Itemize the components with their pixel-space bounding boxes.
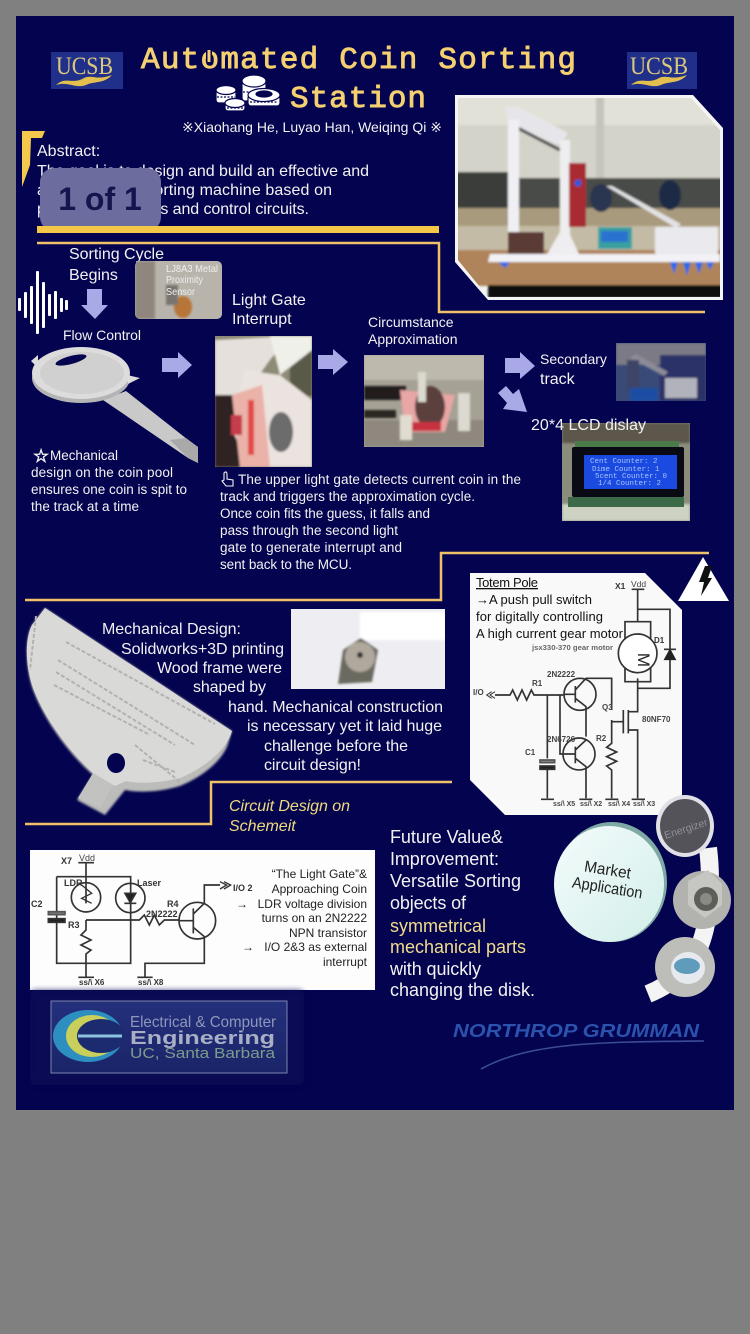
label: circumstance approximation	[368, 314, 458, 347]
circuit labels: 2N2222	[547, 670, 576, 679]
title	[141, 43, 576, 117]
arrow: right 1	[162, 352, 192, 378]
circuit labels: ss/\ X4	[608, 801, 630, 808]
heading: circuit design: Circuit Design on	[229, 798, 350, 815]
text: mechanical design: Solidworks+3D printing	[121, 641, 284, 658]
icon: washer	[655, 937, 715, 997]
logo: ECE UCSB: UC, Santa Barbara	[130, 1045, 276, 1062]
light gate description: NPN transistor	[289, 926, 367, 940]
text: future value: symmetrical	[390, 916, 486, 936]
light gate description: “The Light Gate”&	[272, 867, 367, 881]
text: light gate description: The upper light gate detects current coin in the	[238, 472, 521, 487]
circuit labels: LDR	[64, 878, 83, 888]
circuit labels: Vdd	[631, 579, 646, 589]
light gate description: LDR voltage division	[258, 897, 367, 911]
label: light gate interrupt: Light Gate	[232, 292, 306, 309]
logo: Northrop Grumman: NORTHROP GRUMMAN	[453, 1021, 700, 1041]
abstract text: The goal is to design and build an effective and	[37, 163, 369, 180]
totem pole text: A high current gear motor	[476, 626, 624, 641]
photo: circumstance approximation	[364, 355, 484, 447]
label: secondary track: Secondary	[540, 351, 607, 367]
band connecting items	[648, 848, 710, 994]
label: secondary track: track	[540, 371, 576, 388]
text: mechanical design: shaped by	[193, 679, 266, 696]
text: future value: mechanical parts	[390, 937, 526, 957]
yellow divider bar	[37, 226, 439, 233]
authors: ※Xiaohang He, Luyao Han, Weiqing Qi ※	[182, 119, 442, 135]
abstract text: Abstract:	[37, 143, 100, 160]
text: mechanical coin pool: ☆	[33, 446, 49, 466]
photo: LCD display: Cent Counter: 2	[590, 458, 658, 466]
circuit: light gate	[48, 863, 231, 977]
label: circumstance approximation: Circumstance	[368, 314, 454, 330]
text: future value	[389, 827, 535, 1000]
circuit labels: D1	[654, 636, 665, 645]
photo: gear motor mount	[291, 609, 445, 689]
totem pole text	[476, 575, 624, 641]
photo: light gate	[215, 336, 312, 467]
logo: UCSB left	[51, 52, 123, 89]
market application disc	[554, 822, 667, 942]
icon: coin stacks	[216, 75, 280, 111]
circuit labels: R3	[68, 920, 80, 930]
circuit: gear motor driver	[487, 589, 676, 799]
text: future value: changing the disk.	[390, 980, 535, 1000]
circuit labels	[473, 579, 671, 808]
circuit labels: C2	[31, 899, 43, 909]
circuit labels: I/O	[473, 688, 484, 697]
text: light gate description: pass through the second light	[220, 523, 398, 538]
text: mechanical design: is necessary yet it laid huge	[247, 718, 442, 735]
text: mechanical design	[102, 621, 443, 774]
heading: circuit design: Schemeit	[229, 818, 296, 835]
photo: proximity sensor: Proximity	[166, 274, 204, 286]
text: mechanical design: Mechanical Design:	[102, 621, 241, 638]
photo: secondary track	[616, 343, 706, 401]
text: future value: Future Value&	[390, 827, 503, 847]
logo: Northrop Grumman	[453, 1021, 704, 1069]
page badge: 1 of 1	[58, 181, 142, 217]
text: mechanical coin pool: design on the coin pool	[31, 465, 173, 480]
circuit labels: ss/\ X2	[580, 801, 602, 808]
circuit labels: 2N2222	[146, 909, 178, 919]
light gate description: Approaching Coin	[272, 882, 367, 896]
circuit labels: X1	[615, 581, 626, 591]
circuit labels: Q3	[602, 703, 613, 712]
text: future value: objects of	[390, 893, 467, 913]
market application disc: Market	[583, 858, 633, 883]
bracket accent	[22, 131, 45, 187]
frame line: upper	[37, 243, 705, 312]
totem pole text: for digitally controlling	[476, 609, 603, 624]
frame line: lower	[25, 782, 452, 824]
circuit labels: 80NF70	[642, 715, 671, 724]
logo: UCSB right	[627, 52, 697, 89]
coin pool model	[31, 347, 198, 463]
text: future value: with quickly	[389, 959, 481, 979]
poster panel	[16, 16, 734, 1110]
photo: proximity sensor: LJ8A3 Metal	[166, 263, 218, 275]
circuit labels: Vdd	[79, 853, 95, 863]
circuit labels: M	[634, 653, 653, 667]
abstract text: automatic coin sorting machine based on	[37, 182, 332, 199]
arrow: right 2	[318, 349, 348, 375]
text: mechanical coin pool: the track at a time	[31, 499, 139, 514]
circuit labels: R4	[167, 899, 179, 909]
circuit labels: ss/\ X6	[79, 978, 105, 987]
text: mechanical design: circuit design!	[264, 757, 361, 774]
label: sorting cycle: Sorting Cycle	[69, 246, 164, 263]
label: sorting cycle: Begins	[69, 267, 118, 284]
abstract text: precise mechanics and control circuits.	[37, 201, 309, 218]
panel: light gate circuit	[30, 850, 375, 990]
title: Automated Coin Sorting	[141, 43, 576, 78]
logo: ECE UCSB: Engineering	[130, 1028, 275, 1048]
circuit labels: R1	[532, 679, 543, 688]
label: LCD display: 20*4 LCD dislay	[531, 417, 646, 434]
logo: ECE UCSB	[30, 990, 304, 1085]
text: future value: Versatile Sorting	[390, 871, 521, 891]
totem pole text: →A push pull switch	[476, 592, 592, 607]
text: mechanical coin pool	[31, 446, 187, 514]
label: light gate interrupt: Interrupt	[232, 311, 292, 328]
light gate description: turns on an 2N2222	[262, 911, 367, 925]
photo: proximity sensor	[135, 261, 222, 319]
text: future value: Improvement:	[390, 849, 499, 869]
logo: ECE UCSB: Electrical & Computer	[130, 1014, 277, 1031]
arrow: diagonal down	[498, 386, 527, 412]
totem pole text: Totem Pole	[476, 575, 538, 590]
icon: coin cell battery: Energizer	[663, 816, 710, 842]
label: circumstance approximation: Approximation	[368, 331, 458, 347]
photo: LCD display: 1/4 Counter: 2	[598, 480, 661, 488]
circuit labels: R2	[596, 734, 607, 743]
text: mechanical coin pool: ensures one coin is spit to	[31, 482, 187, 497]
light gate description: →	[242, 940, 254, 954]
circuit labels: ss/\ X5	[553, 801, 575, 808]
light gate description	[236, 867, 368, 969]
photo: proximity sensor: Sensor	[166, 286, 195, 298]
circuit labels: I/O 2	[233, 883, 253, 893]
text: light gate description: track and triggers the approximation cycle.	[220, 489, 475, 504]
frame line: middle	[25, 553, 709, 600]
label: sorting cycle	[69, 246, 164, 284]
circuit labels: ss/\ X3	[633, 801, 655, 808]
icon: pointing hand	[222, 472, 233, 486]
icon: nut	[673, 870, 731, 929]
light gate description: interrupt	[323, 955, 368, 969]
circuit labels: Laser	[137, 878, 162, 888]
page badge	[40, 168, 161, 231]
circuit labels: C1	[525, 748, 536, 757]
light gate description: I/O 2&3 as external	[264, 940, 367, 954]
circuit labels	[31, 853, 253, 987]
label: secondary track	[540, 351, 607, 388]
photo: LCD display: 5cent Counter: 0	[595, 473, 668, 481]
text: mechanical design: challenge before the	[264, 738, 408, 755]
text: light gate description: Once coin fits the guess, it falls and	[220, 506, 430, 521]
text: light gate description: gate to generate interrupt and	[220, 540, 402, 555]
circuit labels: 2N6726	[547, 735, 576, 744]
panel: totem pole	[470, 573, 682, 815]
3D printed half disc	[27, 608, 232, 815]
text: mechanical design: Wood frame were	[157, 660, 282, 677]
logo: UCSB left: UCSB	[56, 53, 113, 80]
arrow: right 3	[505, 352, 535, 379]
photo: LCD display	[562, 423, 690, 521]
icon: coin cell battery	[656, 795, 714, 857]
logo: UCSB right: UCSB	[630, 53, 688, 80]
label: light gate interrupt	[232, 292, 306, 328]
circuit labels: jsx330-370 gear motor	[531, 643, 613, 652]
heading: circuit design	[229, 798, 350, 835]
text: light gate description: sent back to the MCU.	[220, 557, 352, 572]
text: mechanical design: hand. Mechanical construction	[228, 699, 443, 716]
abstract text	[37, 143, 369, 218]
icon: sound wave	[18, 271, 68, 334]
label: flow control: Flow Control	[63, 327, 141, 343]
title: Station	[290, 82, 426, 117]
market application disc: Application	[571, 875, 644, 902]
arrow: down	[81, 289, 108, 319]
circuit labels: X7	[61, 856, 72, 866]
text: mechanical coin pool: Mechanical	[50, 448, 118, 463]
light gate description: →	[236, 897, 248, 911]
icon: high voltage warning	[678, 557, 729, 601]
text: light gate description	[220, 472, 521, 572]
photo: LCD display: Dime Counter: 1	[592, 466, 660, 474]
circuit labels: ss/\ X8	[138, 978, 164, 987]
photo: machine	[455, 95, 725, 300]
